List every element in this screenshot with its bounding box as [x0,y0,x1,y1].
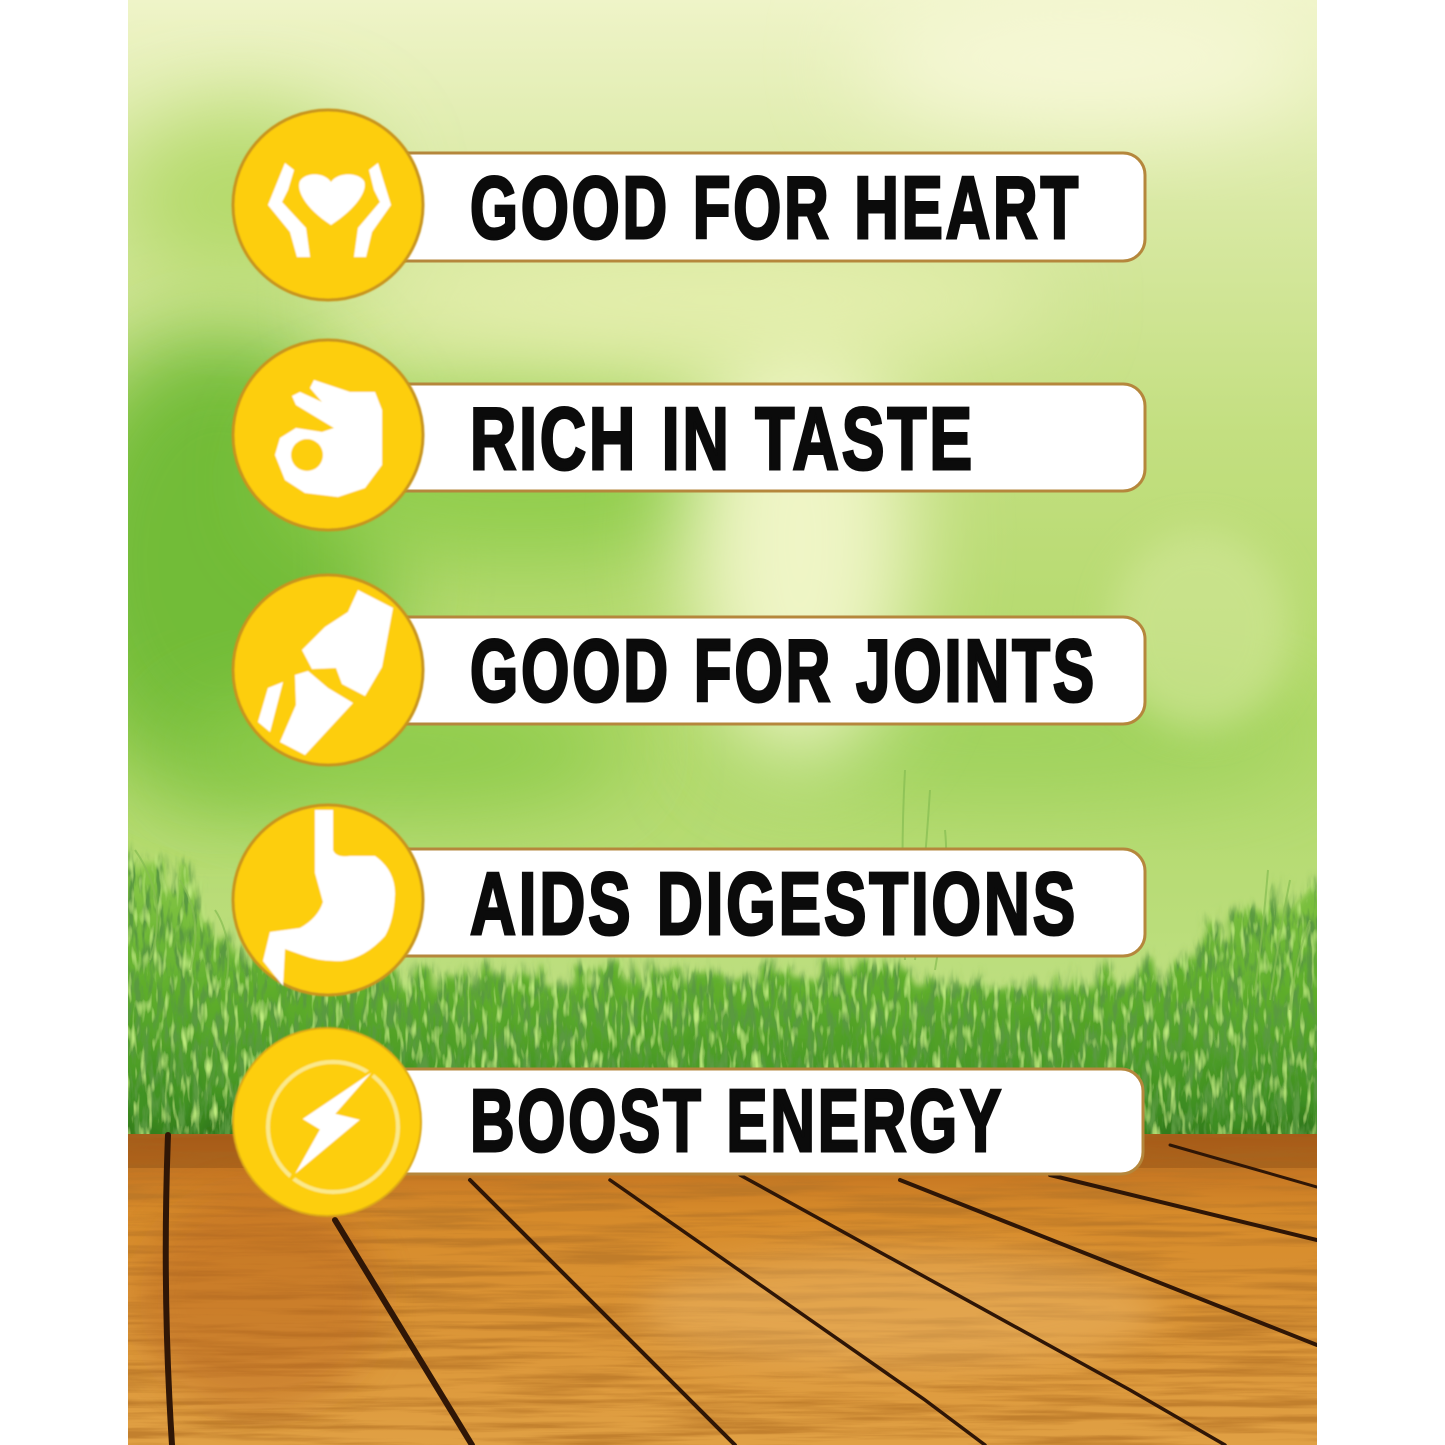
label pill [380,153,1145,261]
label pill [380,617,1145,724]
benefit row: rich in taste [233,340,1145,530]
benefit row: aids digestions [233,805,1145,995]
wooden deck [128,1134,1317,1445]
label text: BOOST ENERGY [470,1071,1004,1170]
icon: knee joint [233,575,423,765]
grass band [128,770,1317,1134]
benefit row: good for joints [233,575,1145,765]
label text: AIDS DIGESTIONS [470,854,1078,953]
label text: RICH IN TASTE [470,389,975,488]
icon: ok hand [233,340,423,530]
label pill [380,1069,1143,1174]
icon: stomach [233,805,423,995]
label pill [380,384,1145,491]
label text: GOOD FOR HEART [470,158,1081,257]
label text: GOOD FOR JOINTS [470,621,1097,720]
icon: hands holding heart [233,110,423,300]
icon: lightning bolt [233,1028,421,1216]
benefit row: good for heart [233,110,1145,300]
benefit row: boost energy [233,1028,1143,1216]
label pill [380,849,1145,956]
